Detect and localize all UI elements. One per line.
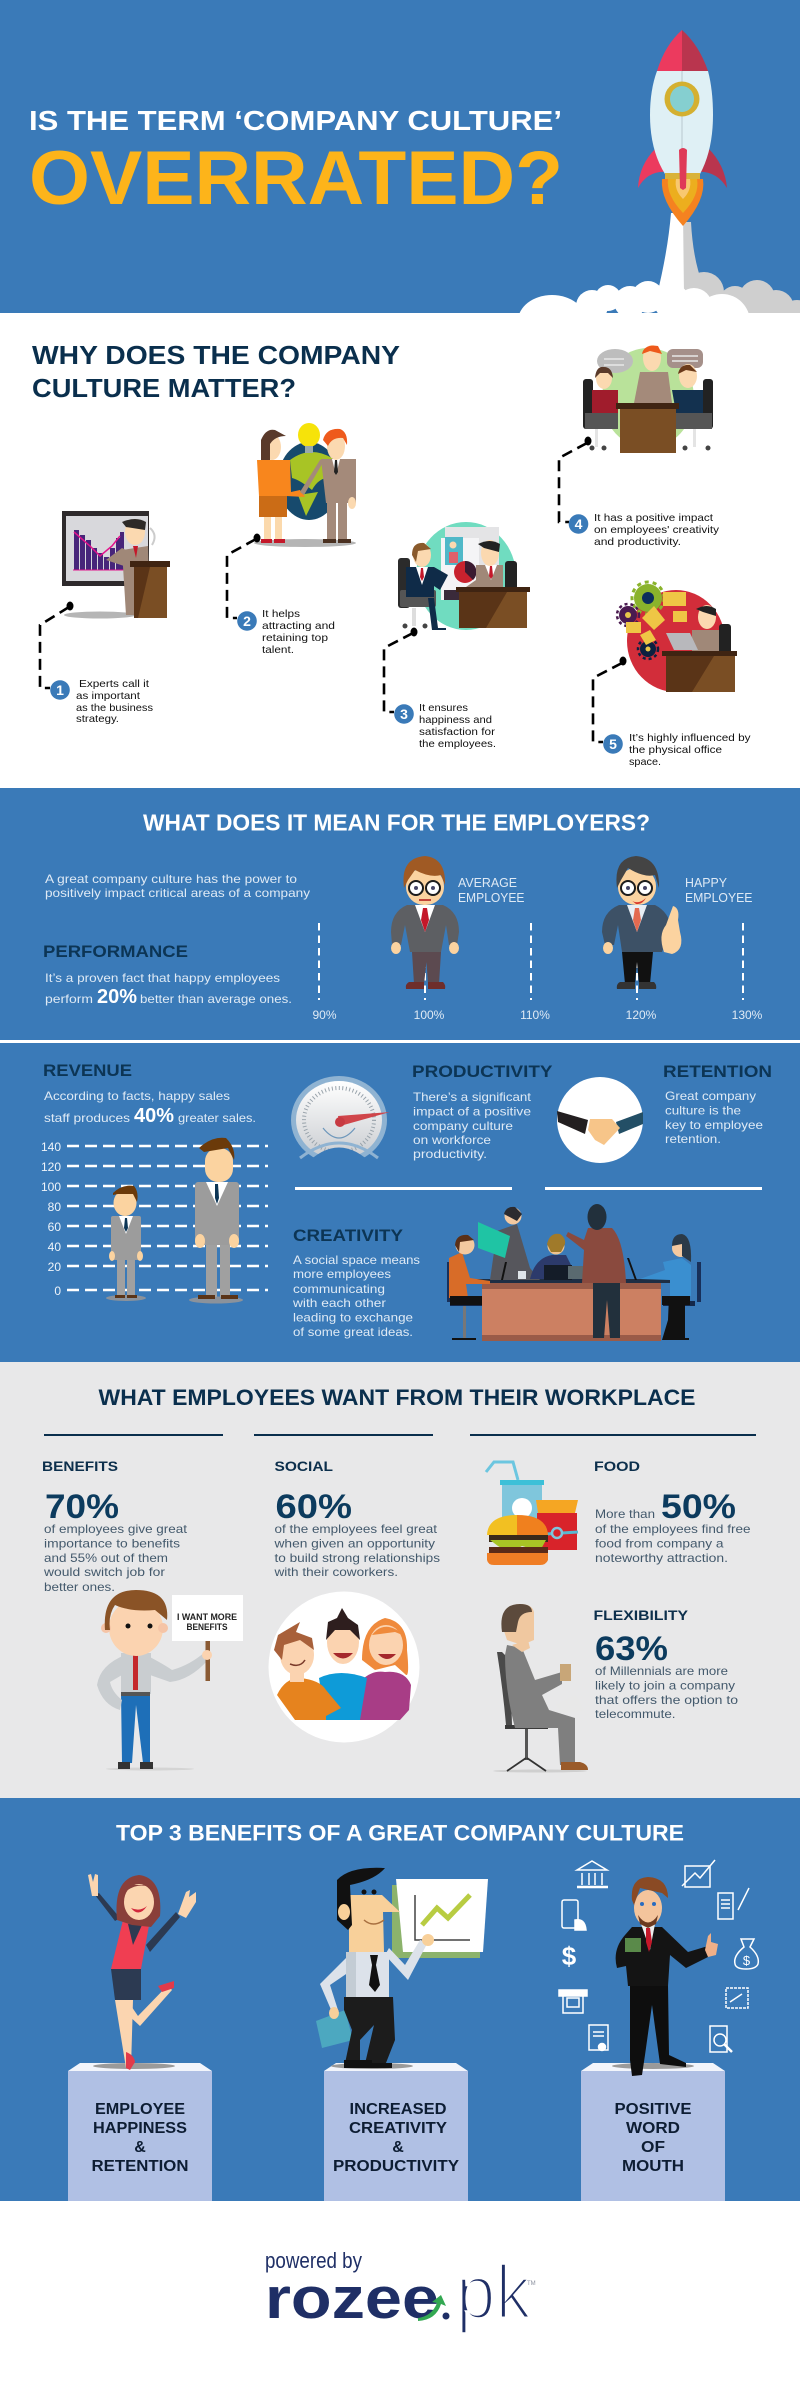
step 2: dashed connector and number xyxy=(227,534,260,631)
illustration: meeting with speech bubbles xyxy=(583,345,713,453)
pedestal: employee happiness xyxy=(68,2063,212,2201)
text: step 2: It helps xyxy=(262,608,300,620)
heading: why does the company culture matter: WHY DOES THE COMPANY xyxy=(32,340,400,370)
text: retention: culture is the xyxy=(665,1104,741,1118)
chart: height scale with two employees: 0 xyxy=(54,1284,61,1298)
illustration: man holding sign xyxy=(97,1590,243,1770)
step 4: dashed connector and number xyxy=(559,436,592,534)
step 3: dashed connector and number xyxy=(384,628,418,724)
logo: powered by rozee.pk xyxy=(265,2248,536,2335)
pedestal: employee happiness: & xyxy=(134,2139,146,2156)
panel: what employees want xyxy=(0,1362,800,1798)
heading: why does the company culture matter xyxy=(32,340,400,403)
logo: powered by rozee.pk: pk xyxy=(456,2250,532,2335)
pedestal: employee happiness: HAPPINESS xyxy=(93,2120,187,2137)
text: creativity xyxy=(292,1253,420,1339)
heading: revenue: REVENUE xyxy=(43,1061,132,1080)
block: flexibility: telecommute. xyxy=(595,1707,676,1721)
text: intro: positively impact critical areas of a company xyxy=(45,886,310,900)
block: social: to build strong relationships xyxy=(274,1551,440,1565)
text: productivity xyxy=(413,1090,532,1161)
text: revenue: staff produces xyxy=(44,1111,130,1125)
step 3: dashed connector and number: 3 xyxy=(400,706,408,722)
block: flexibility xyxy=(594,1607,738,1721)
pedestal: increased creativity: CREATIVITY xyxy=(349,2120,447,2137)
block: social: of the employees feel great xyxy=(274,1522,438,1536)
chart: height scale with two employees: 120 xyxy=(41,1160,61,1174)
text: revenue: According to facts, happy sales xyxy=(44,1089,230,1103)
heading: WHAT EMPLOYEES WANT FROM THEIR WORKPLACE xyxy=(98,1385,696,1410)
text: step 2 xyxy=(262,608,335,656)
text: step 3: satisfaction for xyxy=(419,726,496,738)
text: step 1 xyxy=(76,678,153,725)
text: step 2: attracting and xyxy=(262,620,335,632)
text: retention: key to employee xyxy=(665,1118,763,1132)
block: benefits: BENEFITS xyxy=(42,1458,118,1474)
pedestal: increased creativity: PRODUCTIVITY xyxy=(333,2158,459,2175)
icon: magnifier xyxy=(710,2026,732,2052)
text: retention: Great company xyxy=(665,1089,756,1103)
chart: performance scale: 90% xyxy=(312,1008,337,1022)
text: step 1: strategy. xyxy=(76,713,119,725)
pedestal: positive word of mouth: WORD xyxy=(626,2120,680,2137)
block: food: More than xyxy=(595,1507,655,1521)
heading: retention: RETENTION xyxy=(663,1062,772,1081)
chart: height scale with two employees: 40 xyxy=(48,1240,61,1254)
panel: header xyxy=(0,0,800,313)
text: step 3: the employees. xyxy=(419,738,496,750)
block: benefits: 70% xyxy=(45,1488,119,1526)
block: social: when given an opportunity xyxy=(273,1536,435,1550)
text: performance: 20% xyxy=(97,986,137,1008)
text: step 4: and productivity. xyxy=(594,536,681,548)
pedestal: positive word of mouth: POSITIVE xyxy=(614,2101,692,2118)
text: step 3: It ensures xyxy=(419,702,468,714)
pedestal: employee happiness: EMPLOYEE xyxy=(95,2101,185,2118)
text: step 2: retaining top xyxy=(262,632,328,644)
block: food xyxy=(594,1458,751,1565)
text: step 5: space. xyxy=(629,756,661,768)
pedestal: increased creativity: & xyxy=(392,2139,404,2156)
block: benefits: of employees give great xyxy=(44,1522,188,1536)
chart: performance scale: 100% xyxy=(414,1008,445,1022)
icon: smoke clouds xyxy=(520,213,800,313)
title line 2: OVERRATED? xyxy=(29,136,563,221)
heading: WHAT DOES IT MEAN FOR THE EMPLOYERS? xyxy=(143,810,650,836)
logo: powered by rozee.pk: TM xyxy=(527,2281,536,2287)
panel: what it means for employers xyxy=(0,788,800,1040)
illustration: businessman in black suit xyxy=(616,1877,718,2076)
pedestal: increased creativity: INCREASED xyxy=(350,2101,446,2118)
text: step 4: on employees' creativity xyxy=(594,524,720,536)
text: step 5: It’s highly influenced by xyxy=(629,732,751,744)
illustration: office space with gears and mail xyxy=(617,582,737,692)
block: social: with their coworkers. xyxy=(273,1565,398,1579)
chart: performance scale: 130% xyxy=(732,1008,763,1022)
pedestal: positive word of mouth xyxy=(581,2063,725,2201)
icons: finance outline icons xyxy=(559,1860,758,2052)
text: productivity: There’s a significant xyxy=(413,1090,532,1104)
pedestal: employee happiness: RETENTION xyxy=(92,2158,188,2175)
block: food: food from company a xyxy=(595,1536,724,1550)
text: step 4 xyxy=(594,512,720,548)
text: step 5 xyxy=(629,732,751,768)
step 1: dashed connector and number xyxy=(40,602,74,700)
label: happy employee: EMPLOYEE xyxy=(685,890,753,905)
text: performance: It’s a proven fact that happy employees xyxy=(45,971,280,985)
text: revenue: greater sales. xyxy=(178,1111,256,1125)
pedestal: increased creativity xyxy=(324,2063,468,2201)
illustration: presenter at podium xyxy=(62,511,170,618)
illustration: happy employee xyxy=(602,856,681,989)
block: flexibility: likely to join a company xyxy=(595,1678,735,1692)
label: average employee xyxy=(458,875,525,905)
text: step 4: It has a positive impact xyxy=(594,512,713,524)
text: creativity: more employees xyxy=(293,1267,391,1281)
step 5: dashed connector and number: 5 xyxy=(609,736,617,752)
block: benefits: would switch job for xyxy=(43,1565,165,1579)
text: performance: better than average ones. xyxy=(140,992,292,1006)
text: step 1: Experts call it xyxy=(79,678,149,690)
block: food: 50% xyxy=(661,1488,736,1526)
text: productivity: productivity. xyxy=(413,1147,487,1161)
text: intro xyxy=(45,872,310,900)
chart: height scale with two employees: 140 xyxy=(41,1140,61,1154)
logo: powered by rozee.pk: powered by xyxy=(265,2248,362,2273)
heading: creativity: CREATIVITY xyxy=(293,1226,404,1245)
text: creativity: with each other xyxy=(292,1296,386,1310)
text: step 2: talent. xyxy=(262,644,294,656)
logo: powered by rozee.pk: rozee xyxy=(265,2266,439,2331)
chart: height scale with two employees xyxy=(41,1138,268,1304)
text: productivity: impact of a positive xyxy=(413,1104,531,1118)
icon: bank xyxy=(577,1861,608,1887)
pedestal: positive word of mouth: OF xyxy=(641,2139,665,2156)
step 2: dashed connector and number: 2 xyxy=(243,613,251,629)
label: happy employee: HAPPY xyxy=(685,875,727,890)
text: retention xyxy=(665,1089,763,1146)
icon: dollar: $ xyxy=(562,1941,577,1971)
icon: money bag xyxy=(735,1939,758,1969)
text: revenue xyxy=(44,1089,256,1127)
block: food: of the employees find free xyxy=(595,1522,751,1536)
sign xyxy=(172,1595,243,1641)
block: benefits: and 55% out of them xyxy=(44,1551,168,1565)
icon: handshake xyxy=(557,1077,643,1163)
block: food: noteworthy attraction. xyxy=(595,1551,728,1565)
icon: rocket xyxy=(638,30,727,226)
text: creativity: leading to exchange xyxy=(293,1310,413,1324)
icon: mobile payment xyxy=(562,1900,586,1930)
block: flexibility: 63% xyxy=(595,1630,668,1668)
pedestal: positive word of mouth: MOUTH xyxy=(622,2158,684,2175)
panel: top 3 benefits xyxy=(0,1798,800,2201)
sign: BENEFITS xyxy=(186,1622,228,1633)
block: flexibility: that offers the option to xyxy=(595,1693,738,1707)
text: step 3: happiness and xyxy=(419,714,492,726)
illustration: average employee xyxy=(391,856,459,989)
text: creativity: communicating xyxy=(293,1282,385,1296)
panel: revenue productivity retention creativity xyxy=(0,1043,800,1362)
block: social: 60% xyxy=(276,1488,352,1526)
title line 1: IS THE TERM ‘COMPANY CULTURE’ xyxy=(29,105,562,136)
heading: TOP 3 BENEFITS OF A GREAT COMPANY CULTURE xyxy=(116,1820,684,1846)
text: retention: retention. xyxy=(665,1132,721,1146)
block: benefits: better ones. xyxy=(44,1580,115,1594)
illustration: food and drink xyxy=(486,1462,578,1565)
text: performance: perform xyxy=(45,992,93,1006)
chart: performance scale: 110% xyxy=(520,1008,550,1022)
text: creativity: of some great ideas. xyxy=(293,1325,413,1339)
step 5: dashed connector and number xyxy=(593,656,626,754)
text: step 5: the physical office xyxy=(629,744,722,756)
block: social: SOCIAL xyxy=(274,1458,333,1474)
illustration: business partners and globe xyxy=(254,423,356,547)
chart: performance scale: 120% xyxy=(626,1008,657,1022)
chart: height scale with two employees: 20 xyxy=(48,1260,61,1274)
text: revenue: 40% xyxy=(134,1105,174,1127)
label: average employee: EMPLOYEE xyxy=(458,890,525,905)
heading: why does the company culture matter: CULTURE MATTER? xyxy=(32,373,296,403)
small employee xyxy=(106,1186,146,1301)
block: food: FOOD xyxy=(594,1458,640,1474)
icon: atm xyxy=(559,1990,587,2013)
chart: height scale with two employees: 60 xyxy=(48,1220,61,1234)
icon: wallet xyxy=(726,1988,748,2008)
text: step 1: as the business xyxy=(76,702,153,714)
text: productivity: on workforce xyxy=(413,1133,491,1147)
illustration: seated man with coffee xyxy=(493,1604,588,1772)
label: happy employee xyxy=(685,875,753,905)
icon: certificate xyxy=(589,2025,608,2050)
heading: productivity: PRODUCTIVITY xyxy=(412,1062,553,1081)
label: average employee: AVERAGE xyxy=(458,875,517,890)
text: performance xyxy=(45,971,292,1008)
tall employee xyxy=(189,1138,243,1304)
illustration: employees in office discussion xyxy=(398,522,530,630)
illustration: three happy coworkers xyxy=(268,1592,420,1742)
heading: performance: PERFORMANCE xyxy=(43,942,188,961)
block: benefits xyxy=(42,1458,188,1594)
icon: document and pen xyxy=(718,1888,749,1919)
block: benefits: importance to benefits xyxy=(44,1536,180,1550)
step 1: dashed connector and number: 1 xyxy=(56,682,64,698)
icon: speedometer gauge xyxy=(291,1076,390,1165)
chart: height scale with two employees: 80 xyxy=(48,1200,61,1214)
icon: growth chart xyxy=(682,1860,715,1887)
text: step 3 xyxy=(419,702,496,750)
step 4: dashed connector and number: 4 xyxy=(575,516,583,532)
block: flexibility: FLEXIBILITY xyxy=(594,1607,689,1623)
illustration: cheerful woman xyxy=(88,1874,196,2070)
sign: I WANT MORE xyxy=(177,1612,237,1623)
illustration: team at table xyxy=(447,1204,701,1341)
text: creativity: A social space means xyxy=(293,1253,420,1267)
text: productivity: company culture xyxy=(413,1119,513,1133)
chart: performance scale xyxy=(312,923,763,1022)
block: social xyxy=(273,1458,440,1579)
block: flexibility: of Millennials are more xyxy=(595,1664,728,1678)
chart: height scale with two employees: 100 xyxy=(41,1180,61,1194)
illustration: man presenting chart xyxy=(316,1868,488,2068)
text: intro: A great company culture has the power to xyxy=(45,872,297,886)
text: step 1: as important xyxy=(76,690,140,702)
icon: money bag: $ xyxy=(743,1953,751,1968)
